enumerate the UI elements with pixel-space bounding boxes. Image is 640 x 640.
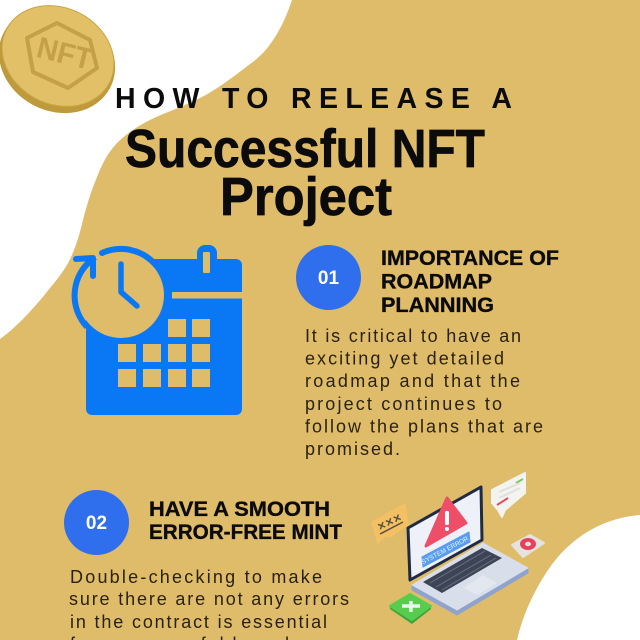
icon: laptop system error: ××× bbox=[375, 509, 405, 534]
text block 01: exciting yet detailed bbox=[305, 349, 504, 369]
heading 02: ERROR-FREE MINT bbox=[149, 521, 342, 544]
heading 01: PLANNING bbox=[381, 294, 494, 317]
icon: NFT coin: NFT bbox=[33, 31, 96, 77]
chat bubble bbox=[492, 473, 525, 517]
text block 02: in the contract is essential bbox=[70, 612, 327, 632]
text block 01: roadmap and that the bbox=[305, 371, 520, 391]
title: successful NFT project: Project bbox=[220, 167, 392, 227]
icon: laptop system error: SYSTEM ERROR bbox=[421, 535, 470, 566]
heading 02: HAVE A SMOOTH bbox=[149, 498, 330, 521]
title: successful NFT project: Successful NFT bbox=[125, 119, 485, 179]
title: how to release a: HOW TO RELEASE A bbox=[115, 83, 512, 115]
heading 01: IMPORTANCE OF bbox=[381, 247, 559, 270]
laptop screen bbox=[408, 487, 482, 580]
badge 01 bbox=[296, 245, 361, 310]
badge 02 bbox=[64, 490, 129, 555]
text block 01: follow the plans that are bbox=[305, 416, 543, 436]
text block 01: project continues to bbox=[305, 394, 502, 414]
laptop base bbox=[412, 568, 528, 615]
text block 01: promised. bbox=[305, 439, 400, 459]
warning triangle bbox=[426, 498, 466, 546]
badge 01: 01 bbox=[318, 268, 339, 289]
badge 02: 02 bbox=[86, 513, 107, 534]
error label bbox=[422, 532, 470, 567]
password bubble bbox=[372, 504, 408, 543]
text block 01: It is critical to have an bbox=[305, 326, 521, 346]
gear tile bbox=[512, 535, 544, 557]
plus tile bbox=[390, 605, 431, 624]
text block 02: sure there are not any errors bbox=[69, 589, 349, 609]
heading 01: ROADMAP bbox=[381, 270, 492, 294]
text block 02: Double-checking to make bbox=[70, 567, 322, 587]
